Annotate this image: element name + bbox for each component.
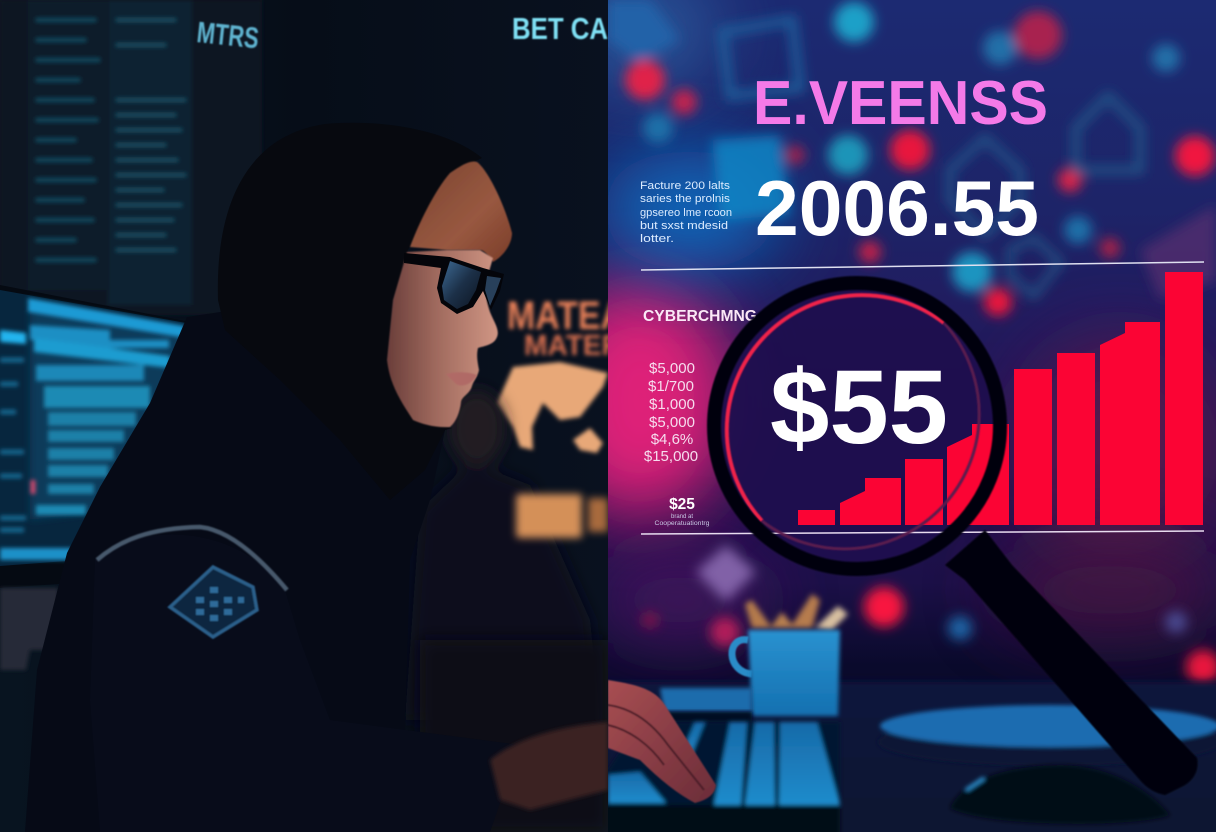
hood	[218, 123, 482, 430]
panel: cost infographic (right half)	[545, 0, 1216, 832]
glowing sign: MATER	[524, 330, 622, 362]
blurred bokeh icons	[608, 0, 1216, 684]
tablet on desk	[660, 688, 752, 712]
description text block: Facture 200 lalts	[640, 180, 731, 192]
outer ring	[714, 283, 1000, 569]
glowing sign: MATEA	[507, 294, 625, 338]
list of amounts: $1,000	[649, 396, 695, 413]
section label: CYBERCHMNG	[643, 308, 757, 325]
handle	[945, 530, 1198, 795]
small stat: $25	[669, 496, 695, 513]
monitor stand	[0, 588, 58, 670]
description text block: gpsereo lme rcoon	[640, 207, 732, 219]
panel: hacker scene (left half)	[0, 0, 625, 832]
desk edge	[420, 640, 608, 832]
arm patch	[170, 567, 257, 637]
coffee mug with snacks	[732, 594, 848, 716]
lips	[446, 372, 477, 386]
hoodie body	[25, 312, 444, 832]
top divider	[641, 262, 1204, 270]
computer mouse	[950, 765, 1170, 824]
glowing sign	[506, 298, 608, 358]
hand on keyboard	[490, 722, 608, 810]
hair	[410, 162, 512, 262]
face	[387, 250, 498, 427]
magnified amount: $55	[770, 349, 948, 466]
desk pad	[878, 702, 1216, 750]
list of amounts	[644, 360, 698, 465]
small stat: Cooperatuationtrg	[654, 521, 710, 527]
magnifying lens interior	[720, 290, 993, 516]
list of amounts: $5,000	[649, 360, 695, 377]
title: E.VEENSS	[753, 69, 1048, 138]
hand on keyboard	[608, 680, 716, 803]
sleeve highlight	[97, 527, 287, 590]
description text block: saries the prolnis	[640, 193, 731, 205]
description text block: lotter.	[640, 233, 674, 245]
magnifying glass	[714, 283, 1198, 795]
colour washes	[545, 280, 735, 520]
description text block: but sxst mdesid	[640, 220, 728, 232]
small stat: brand at	[671, 514, 693, 520]
list of amounts: $4,6%	[651, 431, 693, 448]
sunglasses	[404, 253, 504, 314]
red inner rim	[727, 295, 944, 521]
bottom divider	[641, 531, 1204, 534]
description text block	[640, 180, 732, 245]
glowing screen	[516, 494, 582, 538]
blurred colleague	[447, 388, 518, 471]
background monitor with dim code	[26, 0, 260, 312]
neon sign top right: BET CA	[512, 11, 608, 46]
small stat	[654, 496, 710, 527]
list of amounts: $1/700	[648, 378, 694, 395]
arm shape	[90, 535, 520, 832]
foreground monitor with bright code	[0, 285, 190, 588]
neon sign top left: MTRS	[195, 16, 260, 55]
hooded figure	[25, 123, 608, 832]
headline number: 2006.55	[755, 164, 1039, 252]
keyboard	[600, 722, 840, 832]
glowing world map	[497, 362, 608, 453]
list of amounts: $5,000	[649, 414, 695, 431]
desk surface	[600, 682, 1216, 832]
bar chart	[798, 272, 1203, 525]
list of amounts: $15,000	[644, 448, 698, 465]
